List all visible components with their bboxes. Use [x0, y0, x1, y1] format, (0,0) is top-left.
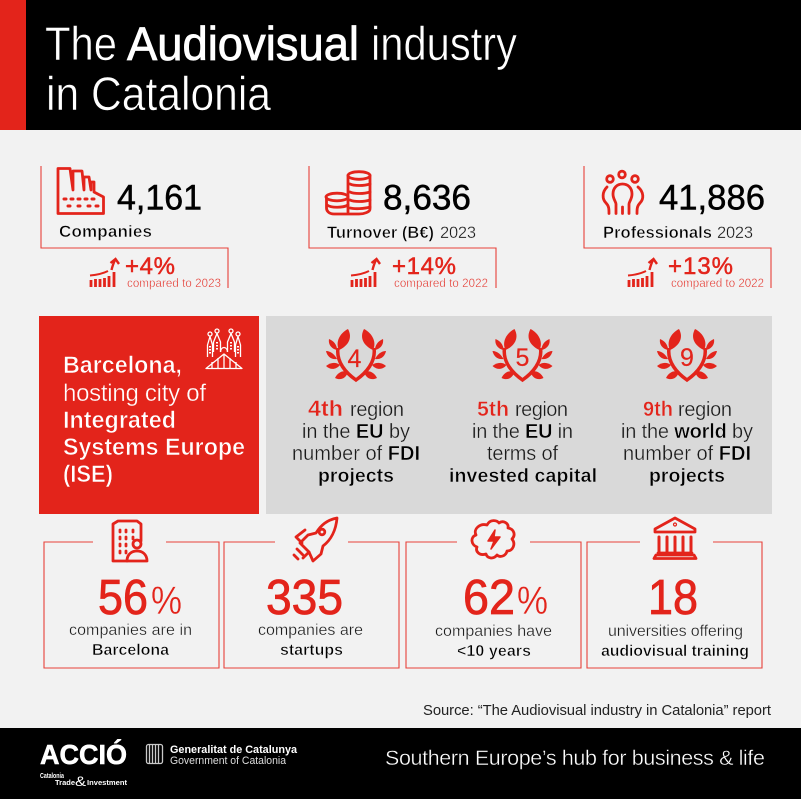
text: Barcelona hosting city [63, 352, 245, 488]
stat: professionals: Professionals [603, 223, 712, 242]
ranking: 9th [621, 329, 753, 487]
icon: people [603, 171, 643, 214]
icon: building and person [113, 521, 147, 561]
footer band [0, 728, 801, 799]
stat: companies: 4,161 [117, 178, 202, 218]
icon: factory [58, 168, 104, 214]
growth: +14% [351, 253, 488, 290]
ranking: 4th: 4 [348, 345, 362, 373]
ranking: 4th: region [350, 399, 404, 421]
ranking: 9th: 9 [680, 344, 694, 372]
icon: coins [326, 172, 370, 214]
logo: Generalitat [146, 744, 298, 767]
logo: ACCIÓ: Trade [55, 778, 75, 787]
growth: +14%: +14% [392, 253, 456, 280]
ranking: 5th: in the EU in [472, 421, 573, 443]
stat: companies: Companies [59, 222, 152, 241]
ranking: 4th: projects [318, 465, 394, 487]
title: industry [371, 17, 517, 70]
icon: university building [654, 518, 696, 558]
card: 335 startups [224, 518, 399, 668]
card: 56% Barcelona [44, 521, 219, 668]
icon: rocket [294, 518, 337, 561]
growth: +13%: compared to 2022 [671, 278, 764, 290]
ranking: 5th: region [515, 399, 568, 421]
card: 335 startups: 335 [266, 571, 343, 625]
title: in Catalonia [46, 67, 272, 120]
ranking: 9th: region [678, 399, 732, 421]
logo: ACCIÓ: ACCIÓ [40, 739, 127, 770]
card: 18 universities: audiovisual training [601, 643, 749, 660]
logo: ACCIÓ: Investment [87, 778, 127, 787]
title [45, 17, 517, 120]
card: 62% young: companies have [435, 623, 552, 640]
ranking: 5th [449, 329, 597, 487]
card: 56% Barcelona: 56 [98, 571, 148, 625]
growth: +4%: compared to 2023 [127, 278, 221, 290]
ranking: 4th [292, 329, 420, 487]
text: Barcelona hosting city: Systems Europe [63, 434, 245, 461]
header band [0, 0, 801, 130]
growth: +4% [90, 253, 221, 290]
card: 62% young: <10 years [457, 643, 531, 660]
stat: professionals: 41,886 [659, 178, 765, 218]
card: 56% Barcelona: Barcelona [92, 642, 169, 659]
title: The [45, 17, 117, 70]
card: 335 startups: startups [280, 642, 343, 659]
stat: turnover [309, 166, 496, 290]
card: 18 universities: universities offering [608, 623, 743, 640]
growth: +13% [628, 253, 764, 290]
ranking: 4th: in the EU by [302, 421, 410, 443]
title: Audiovisual [127, 17, 359, 70]
card: 62% young [406, 521, 581, 668]
ranking: 4th: 4th [308, 396, 343, 421]
card: 56% Barcelona: companies are in [69, 622, 192, 639]
card: 335 startups: companies are [258, 622, 363, 639]
ranking: 5th: invested capital [449, 465, 597, 487]
stat: companies [41, 166, 228, 290]
ranking: 5th: terms of [487, 443, 558, 465]
growth: +4%: +4% [125, 253, 175, 280]
ranking: 5th: 5th [477, 397, 509, 421]
card: 56% Barcelona: % [151, 580, 182, 623]
growth: +14%: compared to 2022 [394, 278, 488, 290]
ranking: 9th: projects [649, 465, 725, 487]
growth: +13%: +13% [668, 253, 733, 280]
stat: professionals [584, 166, 771, 290]
panel: Barcelona ISE [39, 316, 259, 514]
logo: Generalitat: Government of Catalonia [170, 755, 287, 767]
icon: Sagrada Familia [206, 329, 242, 368]
card: 62% young: 62 [463, 571, 515, 625]
text: Barcelona hosting city: Barcelona, [63, 352, 182, 379]
stat: professionals: 2023 [717, 224, 753, 242]
stat: turnover: Turnover (B€) [327, 224, 434, 242]
ranking: 9th: number of FDI [623, 443, 751, 465]
source note: Source: “The Audiovisual industry in Catalonia” report [423, 703, 771, 719]
tagline: Southern Europe’s hub for business & life [385, 746, 765, 770]
stat: turnover: 2023 [440, 224, 476, 242]
text: Barcelona hosting city: (ISE) [63, 461, 113, 488]
ranking: 4th: number of FDI [292, 443, 420, 465]
logo: Generalitat: Generalitat de Catalunya [170, 744, 298, 756]
card: 18 universities: 18 [648, 571, 698, 625]
ranking: 9th: in the world by [621, 421, 753, 443]
ranking: 5th: 5 [516, 344, 529, 372]
logo: ACCIÓ: & [75, 773, 87, 789]
logo: ACCIÓ [40, 739, 127, 789]
logo: ACCIÓ: Catalonia [40, 771, 65, 780]
text: Barcelona hosting city: Integrated [63, 407, 176, 434]
card: 18 universities [587, 518, 762, 668]
card: 62% young: % [517, 580, 548, 623]
panel: rankings [266, 316, 772, 514]
text: Barcelona hosting city: hosting city of [63, 380, 206, 407]
icon: brain with bolt [472, 521, 514, 558]
stat: turnover: 8,636 [383, 178, 471, 218]
ranking: 9th: 9th [643, 397, 673, 421]
